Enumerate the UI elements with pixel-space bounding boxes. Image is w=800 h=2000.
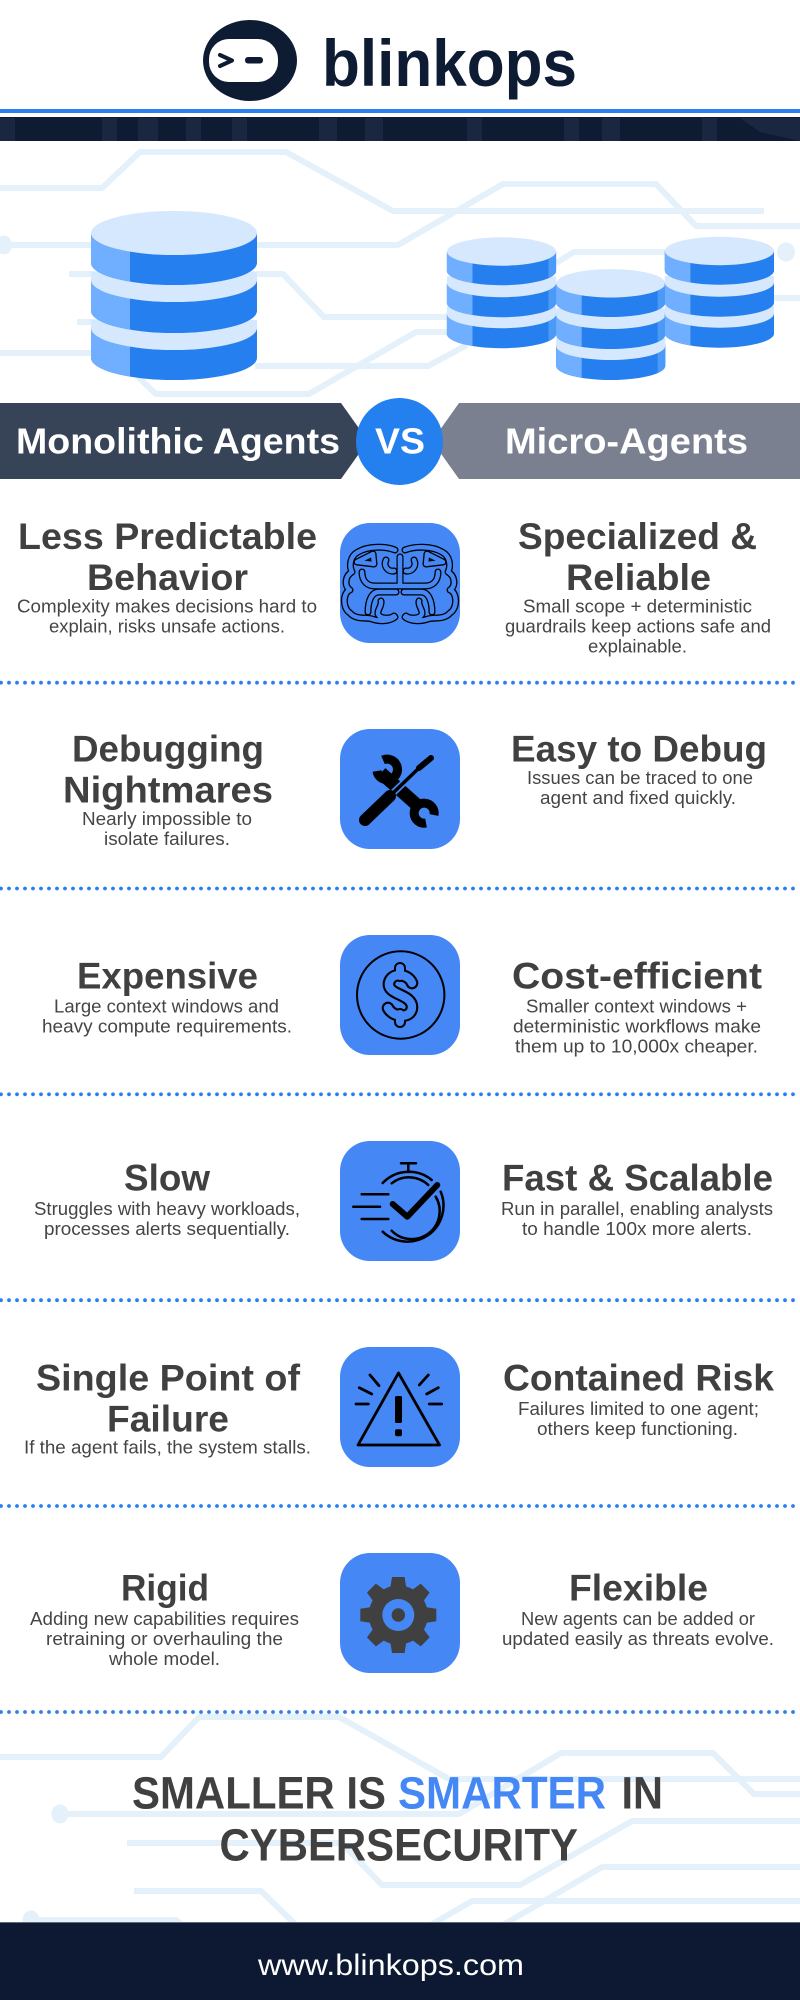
icon: brain — [340, 523, 460, 643]
right text: specialized and reliable: Specialized & — [518, 516, 757, 557]
banner: monolithic agents — [0, 403, 368, 479]
left text: expensive: Expensive — [77, 955, 258, 996]
row 5 — [24, 1347, 774, 1467]
left text: single point of failure: Failure — [107, 1399, 229, 1440]
left text: slow: Slow — [124, 1158, 210, 1199]
right text: specialized and reliable: guardrails keep actions safe and — [505, 617, 771, 637]
left text: less predictable behavior: Less Predictable — [18, 516, 317, 557]
right text: fast and scalable: to handle 100x more alerts. — [522, 1219, 752, 1239]
left text: less predictable behavior: Complexity makes decisions hard to — [17, 597, 317, 617]
website url: www.blinkops.com — [257, 1949, 524, 1982]
right text: contained risk: Failures limited to one agent; — [518, 1399, 759, 1419]
tagline: SMALLER IS — [132, 1767, 386, 1818]
tagline — [132, 1767, 663, 1871]
right text: specialized and reliable: Small scope + deterministic — [523, 597, 752, 617]
left text: debugging nightmares: isolate failures. — [104, 829, 230, 849]
icon: dollar coin — [340, 935, 460, 1055]
logo icon — [203, 20, 297, 101]
right text: specialized and reliable — [505, 516, 771, 657]
right text: cost-efficient: Cost-efficient — [512, 955, 762, 996]
icon: gear — [340, 1553, 460, 1673]
left text: less predictable behavior: Behavior — [87, 557, 248, 598]
right text: cost-efficient: deterministic workflows make — [513, 1016, 761, 1036]
tagline: CYBERSECURITY — [220, 1820, 578, 1871]
left text: slow — [34, 1158, 300, 1239]
right text: contained risk: Contained Risk — [503, 1358, 774, 1399]
icon: micro-agent databases — [447, 237, 774, 380]
right text: contained risk — [503, 1358, 774, 1439]
right text: cost-efficient: Smaller context windows + — [526, 996, 747, 1016]
left text: debugging nightmares: Nightmares — [63, 770, 273, 811]
row 4 — [34, 1141, 773, 1261]
logo — [203, 20, 577, 101]
left text: rigid — [30, 1568, 299, 1669]
banner: monolithic agents: Monolithic Agents — [16, 420, 340, 462]
right text: flexible: Flexible — [569, 1568, 708, 1609]
header: monolithic agents vs micro-agents — [0, 398, 800, 485]
right text: specialized and reliable: Reliable — [566, 557, 711, 598]
left text: slow: processes alerts sequentially. — [44, 1219, 290, 1239]
right text: easy to debug: Issues can be traced to one — [527, 768, 753, 788]
left text: less predictable behavior: explain, risks unsafe actions. — [49, 617, 285, 637]
left text: expensive: heavy compute requirements. — [42, 1016, 292, 1036]
row 1 — [17, 516, 771, 657]
banner: micro-agents — [432, 403, 800, 479]
left text: debugging nightmares — [63, 729, 273, 849]
logo wordmark: blinkops — [322, 26, 577, 100]
left text: expensive: Large context windows and — [54, 996, 279, 1016]
banner: micro-agents: Micro-Agents — [505, 420, 748, 462]
left text: rigid: Adding new capabilities requires — [30, 1609, 299, 1629]
row 3 — [42, 935, 762, 1056]
circuit background: top — [0, 152, 800, 394]
left text: expensive — [42, 955, 292, 1036]
right text: easy to debug: agent and fixed quickly. — [540, 788, 736, 808]
right text: fast and scalable: Fast & Scalable — [502, 1158, 773, 1199]
row 6 — [30, 1553, 774, 1673]
left text: single point of failure: Single Point of — [36, 1358, 301, 1399]
footer — [0, 1922, 800, 2000]
left text: single point of failure: If the agent fails, the system stalls. — [24, 1437, 311, 1457]
right text: easy to debug: Easy to Debug — [511, 729, 767, 770]
right text: specialized and reliable: explainable. — [588, 637, 687, 657]
left text: debugging nightmares: Nearly impossible to — [82, 809, 252, 829]
left text: single point of failure — [24, 1358, 311, 1457]
left text: rigid: retraining or overhauling the — [46, 1629, 283, 1649]
right text: flexible: New agents can be added or — [521, 1609, 755, 1629]
circuit background: bottom — [0, 1717, 800, 1930]
left text: slow: Struggles with heavy workloads, — [34, 1199, 300, 1219]
left text: rigid: Rigid — [121, 1568, 209, 1609]
vs badge — [356, 398, 443, 485]
left text: less predictable behavior — [17, 516, 317, 637]
icon: stopwatch with check — [340, 1141, 460, 1261]
right text: contained risk: others keep functioning. — [537, 1419, 738, 1439]
right text: fast and scalable — [501, 1158, 773, 1239]
tagline: IN — [622, 1767, 663, 1818]
tagline: SMARTER — [398, 1767, 606, 1818]
right text: cost-efficient — [512, 955, 762, 1056]
right text: flexible: updated easily as threats evolve. — [502, 1629, 774, 1649]
right text: easy to debug — [511, 729, 767, 808]
right text: cost-efficient: them up to 10,000x cheaper. — [515, 1036, 758, 1056]
row 2 — [63, 729, 767, 849]
icon: warning triangle — [340, 1347, 460, 1467]
right text: flexible — [502, 1568, 774, 1649]
left text: rigid: whole model. — [108, 1649, 220, 1669]
vs badge: VS — [375, 420, 425, 462]
left text: debugging nightmares: Debugging — [72, 729, 264, 770]
icon: large monolithic database — [91, 211, 257, 380]
icon: wrench and screwdriver — [340, 729, 460, 849]
right text: fast and scalable: Run in parallel, enabling analysts — [501, 1199, 773, 1219]
